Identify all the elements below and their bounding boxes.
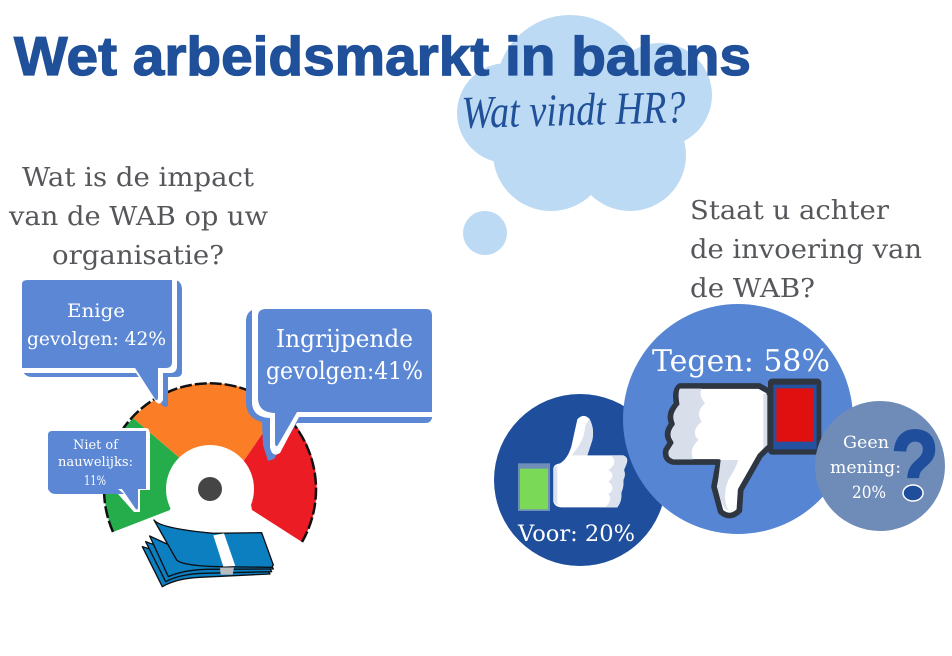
circle: Geen mening 20% <box>815 401 945 531</box>
heading: impact question: van de WAB op uw <box>8 202 268 232</box>
icon: question mark: ? <box>891 411 939 518</box>
heading: impact question: Wat is de impact <box>22 163 255 193</box>
callout: Niet of nauwelijks 11%: 11% <box>84 474 106 489</box>
callout: Ingrijpende gevolgen 41%: Ingrijpende <box>276 325 413 353</box>
callout: Niet of nauwelijks 11%: nauwelijks: <box>58 455 133 470</box>
icon: thumbs down <box>666 379 821 516</box>
thought cloud <box>457 15 712 255</box>
circle: Geen mening 20%: 20% <box>852 483 886 503</box>
callout: Ingrijpende gevolgen 41% <box>246 309 432 461</box>
callout: Enige gevolgen 42% <box>22 280 182 407</box>
heading: impact question: organisatie? <box>52 241 224 271</box>
title: Wet arbeidsmarkt in balans <box>14 25 751 87</box>
callout: Enige gevolgen 42%: Enige <box>67 300 125 322</box>
callout: Niet of nauwelijks 11% <box>48 428 150 512</box>
icon: stack of banknotes <box>142 520 273 587</box>
circle: Voor 20% <box>494 394 666 566</box>
heading: support question: de invoering van <box>690 235 922 265</box>
heading: support question: de WAB? <box>690 274 815 304</box>
heading: impact question <box>8 163 268 271</box>
callout: Niet of nauwelijks 11%: Niet of <box>73 438 119 453</box>
callout: Ingrijpende gevolgen 41%: gevolgen:41% <box>266 357 423 385</box>
heading: support question <box>690 196 922 304</box>
icon: thumbs up <box>518 416 627 511</box>
subtitle: Wat vindt HR?: Wat vindt HR? <box>461 81 686 138</box>
heading: support question: Staat u achter <box>690 196 890 226</box>
callout: Enige gevolgen 42%: gevolgen: 42% <box>27 328 166 350</box>
circle: Geen mening 20%: mening: <box>830 458 901 478</box>
circle: Tegen 58%: Tegen: 58% <box>652 344 830 379</box>
circle: Tegen 58% <box>623 304 853 534</box>
circle: Voor 20%: Voor: 20% <box>517 522 635 547</box>
gauge chart <box>104 383 317 542</box>
circle: Geen mening 20%: Geen <box>843 433 889 453</box>
